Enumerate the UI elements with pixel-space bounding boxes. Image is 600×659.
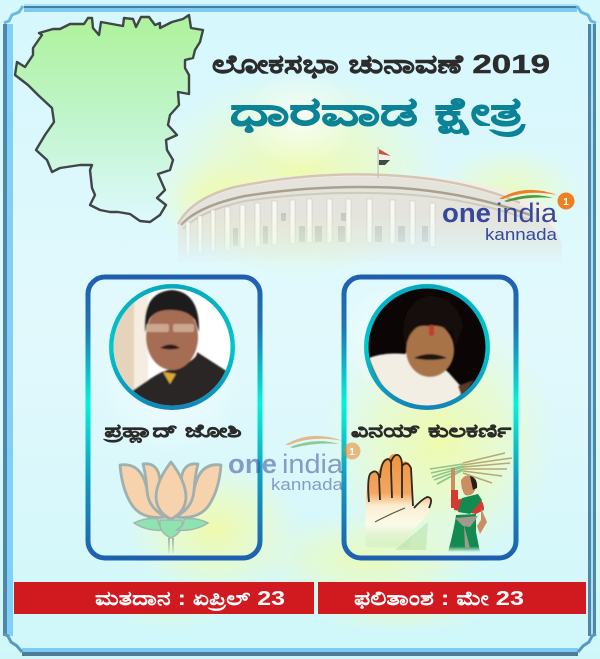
heading: election title: ಲೋಕಸಭಾ ಚುನಾವಣೆ 2019: [212, 49, 550, 79]
candidate photo: Pralhad Joshi: [109, 284, 235, 410]
icon: JDS farmer woman: [430, 453, 512, 552]
logo: oneindia kannada (top): india: [496, 198, 558, 228]
lotus stem: [169, 538, 173, 553]
panel: candidate Pralhad Joshi: [88, 277, 260, 558]
icon: BJP lotus: [120, 462, 221, 519]
banner: result date: ಫಲಿತಾಂಶ : ಮೇ 23: [354, 588, 524, 610]
icon: flag: [378, 147, 391, 178]
banner: polling date: ಮತದಾನ : ಏಪ್ರಿಲ್ 23: [95, 588, 285, 612]
candidate name: ವಿನಯ್ ಕುಲಕರ್ಣಿ: [351, 421, 512, 441]
logo: oneindia kannada (top): [442, 190, 574, 244]
logo: oneindia kannada watermark: kannada: [271, 475, 344, 494]
logo: oneindia kannada (top): 1: [563, 197, 569, 208]
banner: result date: [318, 582, 586, 614]
logo: oneindia kannada watermark: 1: [349, 447, 355, 458]
logo: oneindia kannada watermark: [228, 436, 360, 494]
banner: polling date: [14, 582, 314, 614]
logo: oneindia kannada (top): kannada: [485, 225, 558, 244]
icon: constituency map: [15, 15, 203, 222]
illustration: parliament building: [178, 173, 562, 262]
logo: oneindia kannada (top): one: [442, 198, 491, 228]
logo: oneindia kannada watermark: one: [228, 449, 277, 479]
heading: constituency name: ಧಾರವಾಡ ಕ್ಷೇತ್ರ: [230, 91, 526, 137]
logo: oneindia kannada watermark: india: [282, 449, 344, 479]
lotus leaves: [134, 518, 208, 538]
icon: Congress hand: [365, 454, 431, 550]
candidate photo: Vinay Kulkarni: [364, 284, 490, 410]
candidate name: ಪ್ರಹ್ಲಾದ್ ಜೋಶಿ: [103, 421, 242, 444]
panel: candidate Vinay Kulkarni: [344, 277, 516, 558]
